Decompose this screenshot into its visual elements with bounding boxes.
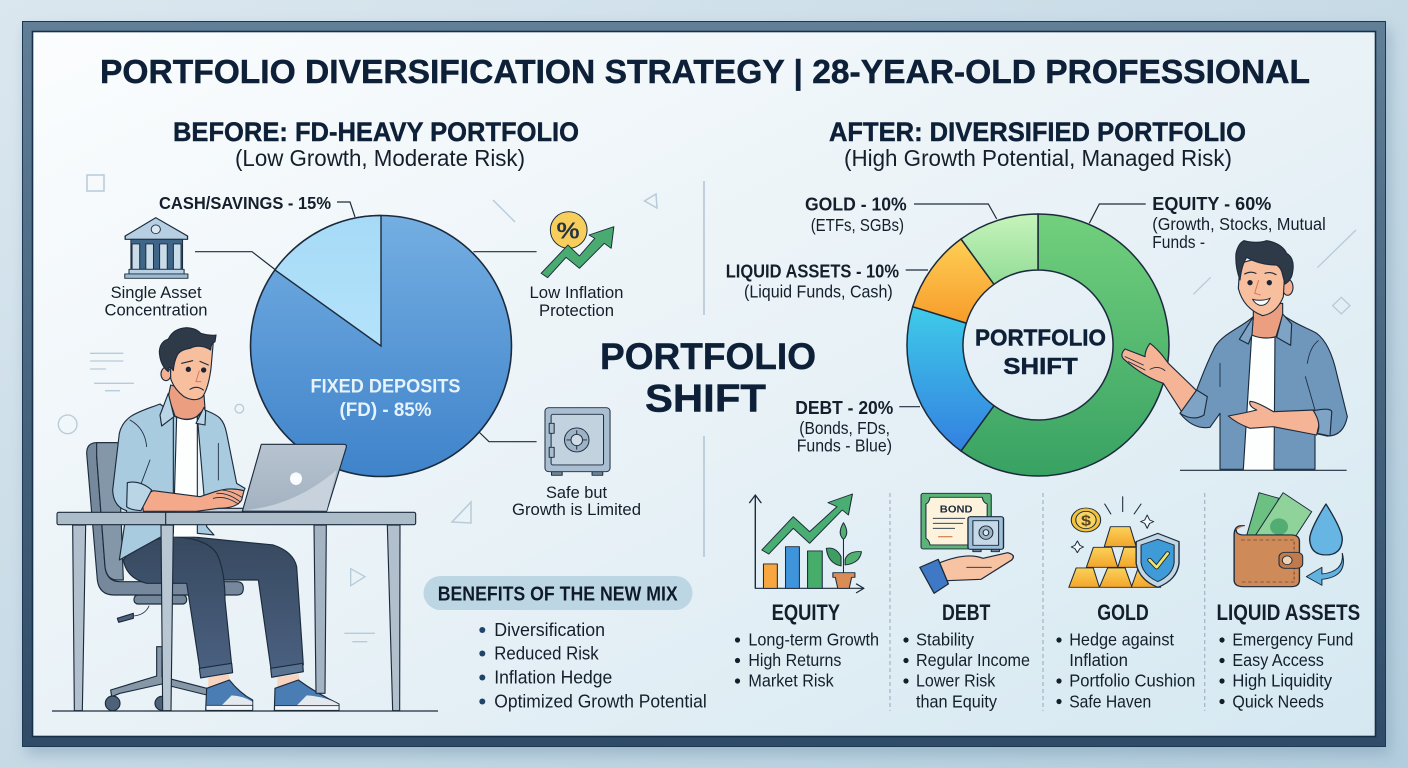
shoes [206,680,339,710]
desk [57,512,416,711]
list: gold [1056,630,1195,711]
jacket [1180,315,1347,469]
center label: portfolio shift: PORTFOLIO [600,336,816,377]
label: liquid assets [726,260,928,301]
label: gold: GOLD - 10% [805,194,907,215]
icon: inflation arrow [541,212,614,278]
label: cash savings: CASH/SAVINGS - 15% [159,193,331,213]
label: gold [805,194,997,235]
shirt [1243,333,1274,469]
laptop [197,444,346,512]
pill: benefits heading [424,576,692,610]
card: equity [735,494,879,691]
heading: debt: DEBT [942,600,991,625]
label: debt: (Bonds, FDs, [799,418,890,438]
collar [1239,314,1292,345]
arm and hand [127,482,244,511]
heading: equity: EQUITY [772,600,840,625]
subheading: before: (Low Growth, Moderate Risk) [235,145,525,171]
card: gold [1056,497,1195,711]
card: liquid assets [1216,493,1360,711]
list: debt [903,630,1030,711]
pill: benefits heading: BENEFITS OF THE NEW MIX [438,584,678,606]
panel: benefits [424,576,707,711]
list: liquid assets: Easy Access [1232,650,1324,670]
list: gold: Portfolio Cushion [1069,671,1195,691]
text: single asset concentration: Single Asset [111,283,202,302]
icon: bond and safe in hand [920,493,1013,593]
pants [123,535,303,689]
subheading: after: (High Growth Potential, Managed Risk) [844,145,1232,171]
list: equity: Long-term Growth [748,630,879,650]
pie chart: before [250,216,512,476]
donut center label [975,325,1106,379]
text: low inflation protection [530,283,624,320]
label: equity: (Growth, Stocks, Mutual [1152,214,1326,234]
panel: after [726,117,1360,711]
center label: portfolio shift [600,336,816,420]
ground line: desk [52,710,438,712]
list: debt: Lower Risk [916,671,996,691]
list: benefits [479,620,707,711]
label: equity: EQUITY - 60% [1152,193,1271,214]
icon: inflation arrow: % [556,219,580,244]
illustration: smiling man [1122,230,1356,470]
label: fixed deposits: FIXED DEPOSITS [310,376,460,398]
list: equity: Market Risk [748,671,834,691]
list: debt: Stability [916,630,974,650]
list: liquid assets: High Liquidity [1232,671,1332,691]
torso [113,385,245,560]
icon: safe [545,408,610,475]
list: liquid assets: Emergency Fund [1232,630,1353,650]
label: debt: DEBT - 20% [795,397,893,418]
icon: gold bars and shield: $ [1081,513,1091,529]
label: debt [795,397,920,456]
text: low inflation protection: Low Inflation [530,283,624,302]
text: safe but growth is limited: Safe but [546,483,607,502]
list: debt: than Equity [916,691,997,711]
list: liquid assets: Quick Needs [1232,691,1324,711]
illustration: worried man at desk [57,328,416,711]
icon: equity growth [750,494,864,593]
donut center label: PORTFOLIO [975,325,1106,351]
center label: portfolio shift: SHIFT [645,378,766,420]
list: equity [735,630,879,691]
icon: bank [125,218,188,278]
heading: after: AFTER: DIVERSIFIED PORTFOLIO [829,117,1246,147]
icon: gold bars and shield [1069,497,1179,587]
donut center label: SHIFT [1003,353,1079,379]
arm: gesturing [1228,401,1332,436]
label: equity [1089,193,1326,252]
label: liquid assets: (Liquid Funds, Cash) [744,281,893,301]
list: benefits: Diversification [494,620,605,640]
list: gold: Hedge against [1069,630,1174,650]
text: single asset concentration [104,283,208,320]
leader: safe [479,432,537,442]
donut chart: after [907,214,1169,476]
neck [1252,303,1283,338]
arm: pointing [1122,343,1207,418]
list: liquid assets [1219,630,1353,711]
label: equity: Funds - [1152,232,1205,252]
text: safe but growth is limited: Growth is Limited [512,500,641,519]
icon: bond and safe in hand: BOND [940,505,972,515]
icon: wallet and water drop [1234,493,1343,587]
chair [87,443,243,711]
head [1236,241,1293,316]
list: benefits: Optimized Growth Potential [494,691,707,711]
text: single asset concentration: Concentration [104,301,208,320]
panel: before [52,117,707,711]
list: benefits: Inflation Hedge [494,667,612,687]
head [159,328,216,400]
list: gold: Inflation [1069,650,1128,670]
heading: liquid assets: LIQUID ASSETS [1216,600,1360,625]
leader: single asset [195,252,275,270]
label: liquid assets: LIQUID ASSETS - 10% [726,260,899,281]
list: gold: Safe Haven [1069,691,1151,711]
card: debt [903,493,1030,711]
list: benefits: Reduced Risk [494,643,600,663]
label: fd share: (FD) - 85% [340,399,432,421]
list: debt: Regular Income [916,650,1030,670]
label: debt: Funds - Blue) [797,436,892,456]
title: PORTFOLIO DIVERSIFICATION STRATEGY | 28-YEAR-OLD PROFESSIONAL [100,53,1310,90]
ground line: man [1180,469,1347,472]
heading: gold: GOLD [1097,600,1149,625]
text: safe but growth is limited [512,483,641,519]
label: gold: (ETFs, SGBs) [811,215,904,235]
text: low inflation protection: Protection [539,301,614,320]
list: equity: High Returns [748,650,842,670]
heading: before: BEFORE: FD-HEAVY PORTFOLIO [173,117,579,147]
leader: inflation [473,251,537,253]
